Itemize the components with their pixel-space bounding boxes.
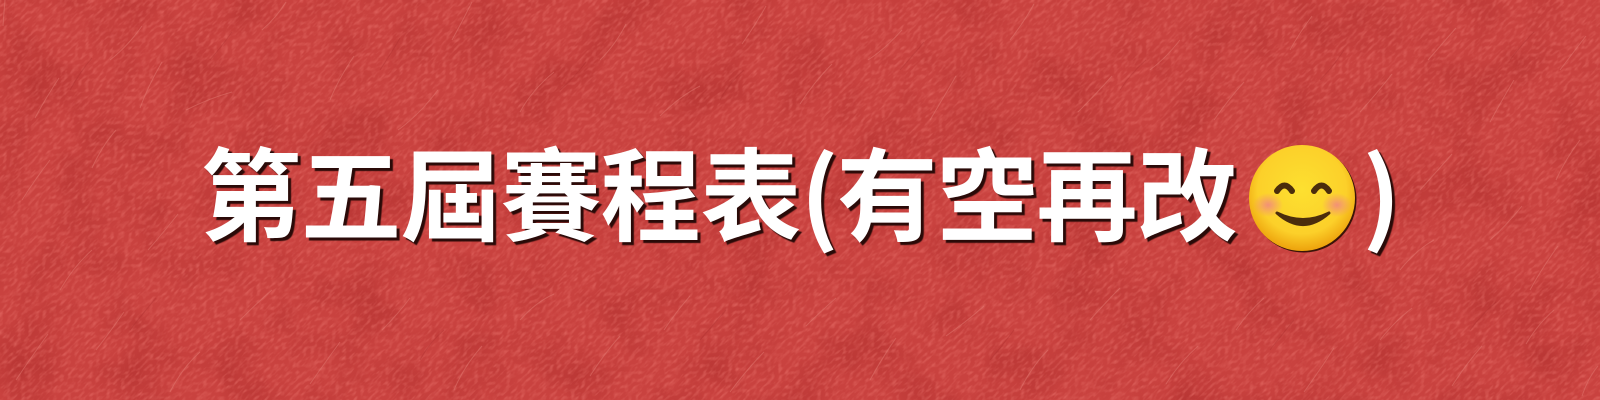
- title: 賽: [500, 117, 602, 263]
- title: 有: [836, 117, 938, 263]
- title: 第: [200, 117, 302, 263]
- title: 再: [1036, 117, 1138, 263]
- title: [200, 117, 1401, 263]
- icon: smiling face emoji: [1249, 145, 1356, 252]
- title: 屆: [400, 117, 502, 263]
- title: 空: [936, 117, 1038, 263]
- title: ): [1362, 117, 1401, 263]
- title: 表: [700, 117, 802, 263]
- title: 改: [1136, 117, 1238, 263]
- title: 五: [300, 117, 402, 263]
- title: (: [800, 117, 839, 263]
- title: 程: [600, 117, 702, 263]
